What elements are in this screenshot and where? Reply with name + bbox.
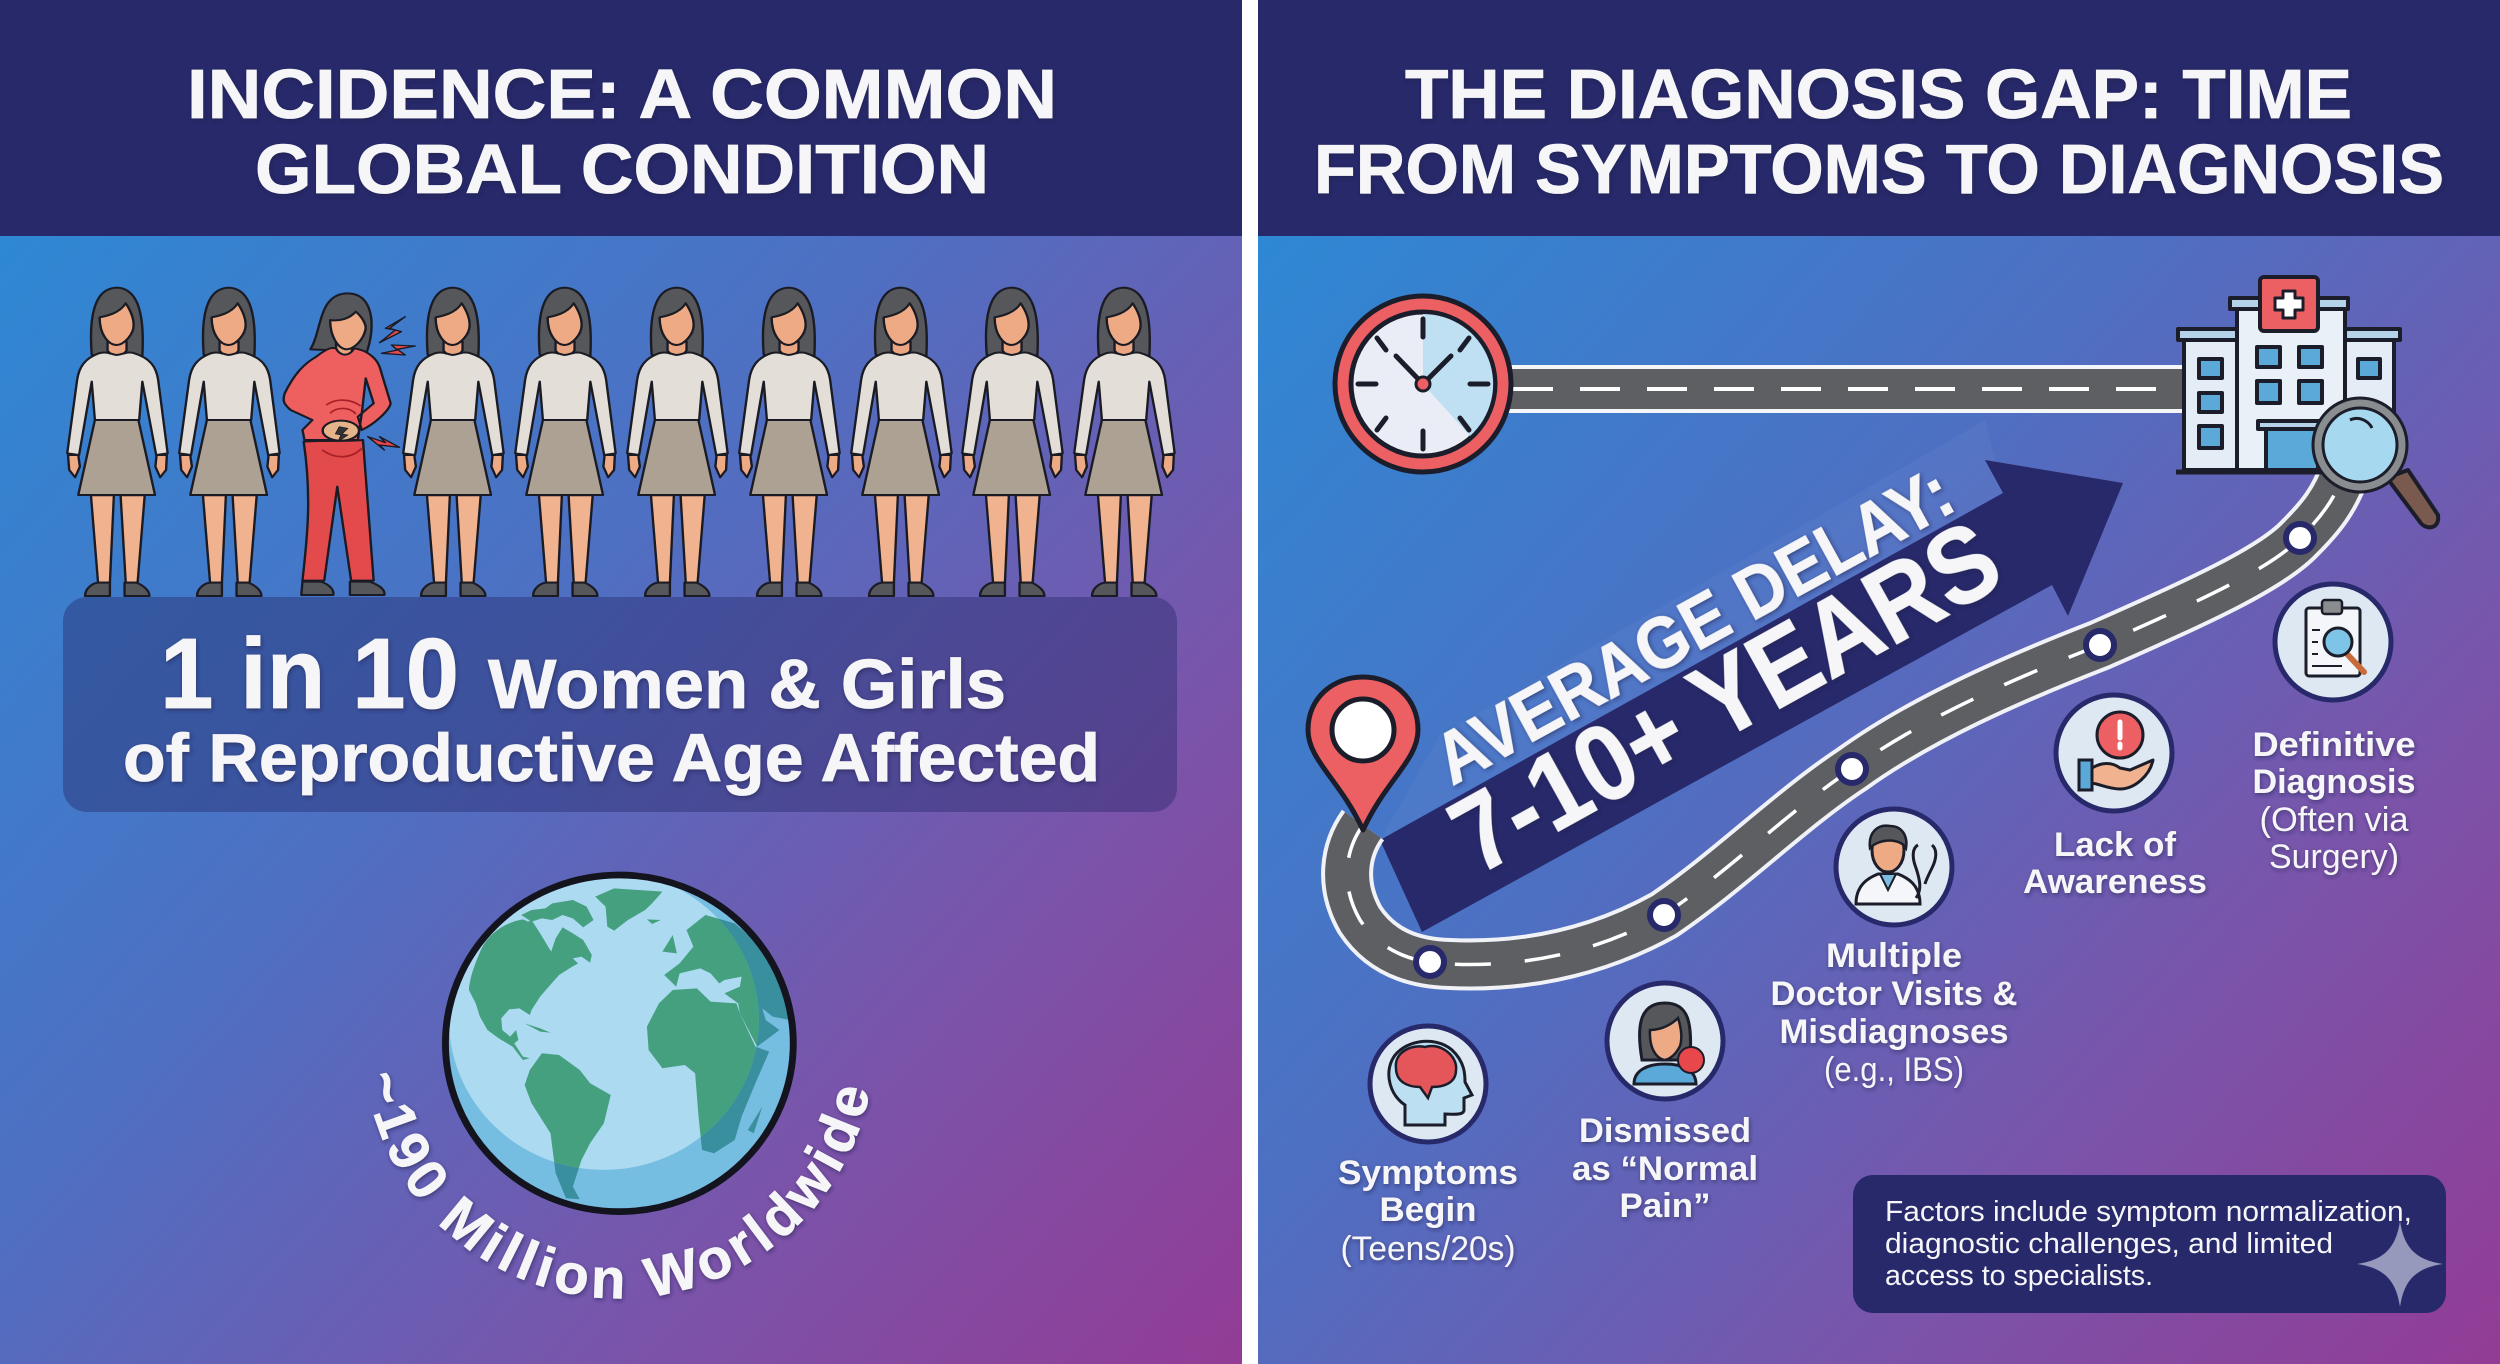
woman 4: [403, 288, 504, 596]
road milestone dots: [1416, 524, 2314, 976]
text: multiple doctor visits: Doctor Visits &: [1770, 975, 2018, 1013]
woman 3: affected, in pain: [284, 293, 415, 595]
icon: magnifying glass: [2313, 398, 2438, 527]
text: multiple doctor visits: Multiple: [1826, 937, 1962, 975]
woman 9: [962, 288, 1063, 596]
icon: globe: [445, 870, 793, 1212]
text: symptoms begin: Begin: [1380, 1191, 1476, 1229]
callout: contributing factors: [1853, 1175, 2446, 1313]
title: diagnosis gap: [1314, 55, 2444, 208]
title: incidence: [187, 55, 1057, 208]
callout text: Factors include symptom normalization,: [1885, 1196, 2412, 1228]
panel: diagnosis gap: [1258, 0, 2500, 1364]
step: definitive diagnosis: [2252, 584, 2416, 876]
statistic text: 1 in 10: [123, 618, 1100, 796]
text: definitive diagnosis: Definitive: [2252, 726, 2416, 764]
icon: clipboard with magnifier: [2275, 584, 2391, 700]
statistic text: 1 in 10: Women & Girls: [488, 645, 1006, 723]
text: lack of awareness: [2023, 826, 2207, 901]
icon: brain in head: [1370, 1026, 1486, 1142]
row of ten women pictogram: [67, 288, 1175, 596]
icon: doctor: [1836, 809, 1952, 925]
label: 7-10+ years: 7-10+ YEARS: [1430, 496, 2019, 896]
header band: incidence: [0, 0, 1242, 236]
title: diagnosis gap: THE DIAGNOSIS GAP: TIME: [1405, 55, 2352, 133]
panel: incidence: [0, 0, 1242, 1364]
statistic text: 1 in 10: 1 in 10: [160, 618, 459, 730]
text: symptoms begin: (Teens/20s): [1340, 1230, 1516, 1268]
title: incidence: INCIDENCE: A COMMON: [187, 55, 1057, 133]
statistic banner: [63, 597, 1177, 812]
woman 2: [179, 288, 280, 596]
icon: sparkle: [2357, 1221, 2443, 1307]
big arrow: [1380, 460, 2123, 932]
diagonal band behind average delay: [1380, 420, 2003, 840]
title: diagnosis gap: FROM SYMPTOMS TO DIAGNOSIS: [1314, 130, 2444, 208]
title: incidence: GLOBAL CONDITION: [255, 130, 989, 208]
text: dismissed: as “Normal: [1572, 1150, 1758, 1188]
text: symptoms begin: [1338, 1154, 1518, 1268]
text: dismissed: Dismissed: [1579, 1112, 1751, 1150]
text: multiple doctor visits: [1770, 937, 2018, 1089]
step: multiple doctor visits: [1770, 809, 2018, 1089]
icon: upset woman: [1607, 983, 1723, 1099]
text: definitive diagnosis: Surgery): [2269, 838, 2399, 876]
header band: diagnosis gap: [1258, 0, 2500, 236]
callout text: [1885, 1196, 2412, 1292]
text: lack of awareness: Awareness: [2023, 863, 2207, 901]
text: definitive diagnosis: [2252, 726, 2416, 876]
callout text: access to specialists.: [1885, 1260, 2153, 1292]
text: lack of awareness: Lack of: [2054, 826, 2177, 864]
step: lack of awareness: [2023, 695, 2207, 901]
woman 6: [627, 288, 728, 596]
icon: hand with alert: [2056, 695, 2172, 811]
straight road: [1500, 365, 2200, 413]
text: dismissed: Pain”: [1620, 1187, 1710, 1225]
woman 10: [1074, 288, 1175, 596]
callout text: diagnostic challenges, and limited: [1885, 1228, 2333, 1260]
curved caption: 190 million worldwide: ~190 Million Worldwide: [373, 1072, 872, 1303]
text: multiple doctor visits: (e.g., IBS): [1824, 1051, 1964, 1089]
text: multiple doctor visits: Misdiagnoses: [1780, 1013, 2008, 1051]
icon: clock: [1335, 296, 1511, 472]
text: definitive diagnosis: Diagnosis: [2252, 763, 2416, 801]
text: symptoms begin: Symptoms: [1338, 1154, 1518, 1192]
icon: start pin: [1308, 677, 1418, 830]
woman 1: [67, 288, 168, 596]
statistic text: 1 in 10: of Reproductive Age Affected: [123, 720, 1100, 796]
woman 5: [515, 288, 616, 596]
step: symptoms begin: [1338, 1026, 1518, 1268]
woman 8: [851, 288, 952, 596]
text: definitive diagnosis: (Often via: [2260, 801, 2409, 839]
label: average delay: AVERAGE DELAY:: [1421, 452, 1967, 800]
winding road: [1347, 470, 2345, 964]
step: dismissed: [1572, 983, 1758, 1225]
icon: hospital: [2176, 277, 2400, 472]
woman 7: [739, 288, 840, 596]
text: dismissed: [1572, 1112, 1758, 1225]
